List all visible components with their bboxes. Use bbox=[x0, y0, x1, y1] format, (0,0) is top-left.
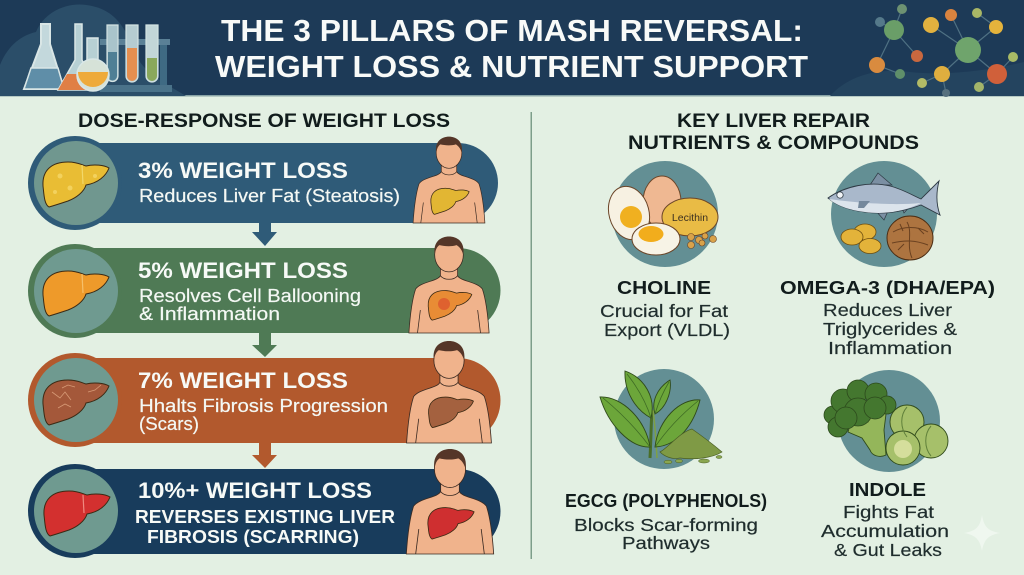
text: 3%: Reduces Liver Fat (Steatosis) bbox=[139, 186, 400, 206]
icon: scarred liver bbox=[28, 353, 122, 447]
heading: dose-response: DOSE-RESPONSE OF WEIGHT LOSS bbox=[78, 111, 450, 132]
icon: healthy liver bbox=[28, 464, 122, 558]
text: 7%: (Scars) bbox=[139, 414, 199, 434]
text: omega-3: Triglycerides & bbox=[823, 319, 957, 339]
panel: 3% weight loss bbox=[28, 136, 498, 246]
text: EGCG: EGCG (POLYPHENOLS) bbox=[565, 491, 767, 511]
heading: key liver repair nutrients: NUTRIENTS & COMPOUNDS bbox=[628, 133, 919, 154]
text: EGCG: Blocks Scar-forming bbox=[574, 515, 758, 535]
header banner bbox=[0, 0, 1024, 97]
icon: sparkle bbox=[964, 515, 1000, 551]
text: indole bbox=[821, 480, 949, 560]
text: 10%+: REVERSES EXISTING LIVER bbox=[135, 507, 395, 527]
text: indole: Fights Fat bbox=[843, 502, 934, 522]
title bbox=[215, 13, 808, 84]
icon: green tea leaves and powder bbox=[600, 369, 722, 469]
icon: fatty liver bbox=[28, 136, 122, 230]
text: choline: Crucial for Fat bbox=[600, 301, 728, 321]
figure: person with healthy liver bbox=[406, 449, 494, 554]
panel: EGCG bbox=[565, 369, 767, 553]
text: 5%: Resolves Cell Ballooning bbox=[139, 286, 361, 306]
icon: molecules bbox=[869, 4, 1018, 97]
arrow: 5% to 7% bbox=[252, 333, 277, 357]
text: choline bbox=[600, 278, 730, 340]
text: 10%+: FIBROSIS (SCARRING) bbox=[147, 527, 359, 547]
text: omega-3 bbox=[780, 278, 995, 358]
panel: omega-3 bbox=[780, 161, 995, 358]
panel: 7% weight loss bbox=[28, 341, 501, 468]
icon: lab glassware bbox=[24, 24, 172, 92]
text: 3% bbox=[138, 158, 400, 206]
text: 10%+ bbox=[135, 478, 395, 547]
arrow: 7% to 10% bbox=[252, 443, 277, 468]
text: 5% bbox=[138, 258, 361, 324]
text: indole: Accumulation bbox=[821, 521, 949, 541]
text: 7% bbox=[138, 368, 388, 434]
text: 5%: 5% WEIGHT LOSS bbox=[138, 258, 348, 283]
figure: person with scarred liver bbox=[407, 341, 491, 443]
text: indole: INDOLE bbox=[849, 480, 926, 500]
panel: 5% weight loss bbox=[28, 237, 501, 357]
title: THE 3 PILLARS OF MASH REVERSAL: bbox=[221, 13, 803, 48]
text: choline: CHOLINE bbox=[617, 278, 711, 298]
title: WEIGHT LOSS & NUTRIENT SUPPORT bbox=[215, 49, 808, 84]
icon: eggs and lecithin: Lecithin bbox=[672, 212, 708, 224]
panel: choline bbox=[600, 161, 730, 340]
text: 5%: & Inflammation bbox=[139, 304, 280, 324]
heading: key liver repair nutrients: KEY LIVER REPAIR bbox=[677, 111, 870, 132]
text: 3%: 3% WEIGHT LOSS bbox=[138, 158, 348, 183]
text: 10%+: 10%+ WEIGHT LOSS bbox=[138, 478, 372, 503]
heading: key liver repair nutrients bbox=[628, 111, 919, 154]
text: omega-3: Reduces Liver bbox=[823, 300, 952, 320]
text: EGCG bbox=[565, 491, 767, 553]
panel: 10%+ weight loss bbox=[28, 449, 501, 558]
icon: eggs and lecithin bbox=[603, 161, 718, 267]
text: 7%: 7% WEIGHT LOSS bbox=[138, 368, 348, 393]
icon: fish, capsules and walnut bbox=[828, 161, 940, 267]
arrow: 3% to 5% bbox=[252, 223, 277, 246]
panel: indole bbox=[821, 370, 949, 560]
text: indole: & Gut Leaks bbox=[834, 540, 942, 560]
text: omega-3: Inflammation bbox=[828, 338, 952, 358]
figure: person with fatty liver bbox=[413, 137, 485, 223]
text: choline: Export (VLDL) bbox=[604, 320, 730, 340]
text: EGCG: Pathways bbox=[622, 533, 710, 553]
icon: broccoli and brussels sprouts bbox=[824, 370, 948, 472]
column divider bbox=[530, 112, 532, 559]
text: omega-3: OMEGA-3 (DHA/EPA) bbox=[780, 278, 995, 298]
icon: inflamed liver bbox=[28, 244, 122, 338]
figure: person with inflamed liver bbox=[409, 237, 489, 333]
text: 7%: Hhalts Fibrosis Progression bbox=[139, 396, 388, 416]
